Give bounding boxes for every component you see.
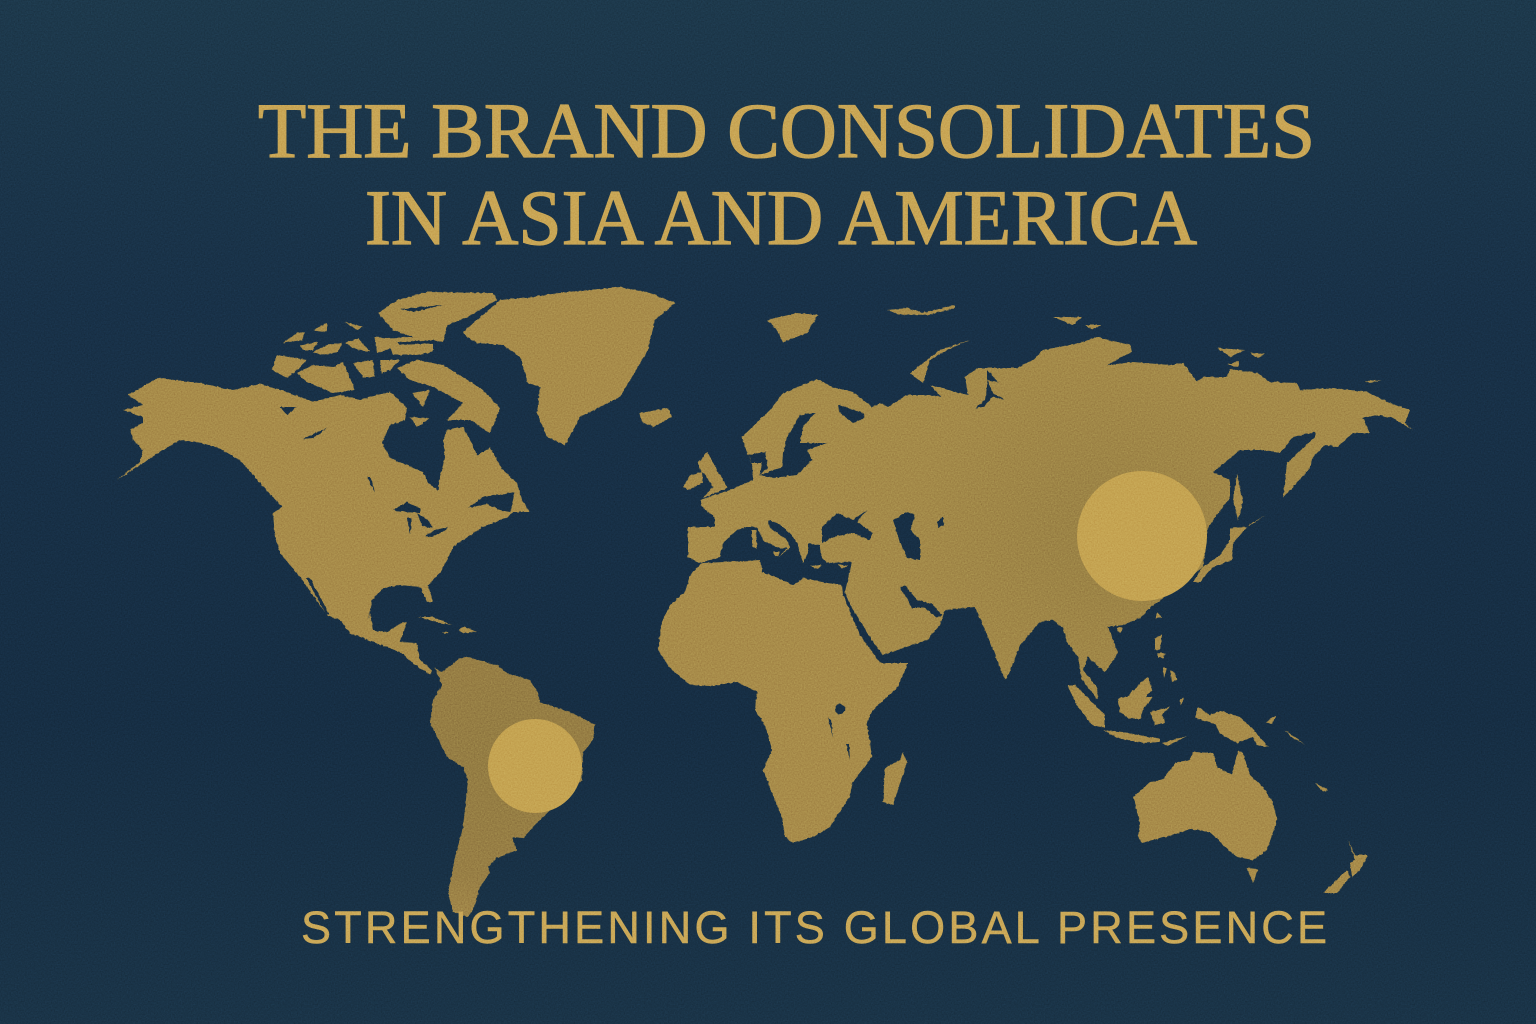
highlight circle: asia xyxy=(1077,471,1207,601)
gulf of st lawrence xyxy=(468,492,515,512)
iceland xyxy=(640,408,672,427)
kattegat xyxy=(747,452,768,475)
title line 1: THE BRAND CONSOLIDATES xyxy=(258,87,1315,174)
persian gulf xyxy=(900,586,942,618)
eurasia xyxy=(688,337,1413,700)
great lakes xyxy=(393,502,448,537)
australia xyxy=(1133,750,1277,883)
aral sea xyxy=(937,517,944,528)
title xyxy=(258,87,1315,261)
arctic channels xyxy=(397,305,443,345)
africa xyxy=(658,560,908,843)
african lakes xyxy=(828,704,850,760)
baltic sea xyxy=(760,413,827,478)
new zealand and pacific islands xyxy=(1265,716,1368,893)
caspian sea xyxy=(893,512,920,560)
world map xyxy=(117,287,1413,917)
new guinea xyxy=(1195,707,1268,747)
white sea xyxy=(838,405,865,423)
black sea xyxy=(822,510,873,543)
canadian lakes xyxy=(280,407,375,493)
sakhalin and japan xyxy=(1193,474,1266,582)
madagascar xyxy=(883,752,907,805)
gulf of ob xyxy=(975,370,1005,408)
highlight circle: south america xyxy=(488,719,582,813)
caribbean islands xyxy=(418,617,477,634)
mediterranean islands xyxy=(752,530,848,569)
subtitle: STRENGTHENING ITS GLOBAL PRESENCE xyxy=(301,902,1327,953)
great britain and ireland xyxy=(683,452,728,498)
arctic ocean russian islands xyxy=(767,305,1382,383)
arctic islands xyxy=(272,292,500,433)
inland seas and lakes xyxy=(280,305,1005,760)
north america xyxy=(117,378,530,675)
greenland xyxy=(463,287,675,445)
south america xyxy=(430,657,595,917)
title line 2: IN ASIA AND AMERICA xyxy=(365,174,1197,261)
gulf of california xyxy=(306,578,329,614)
southeast asian islands xyxy=(1067,612,1187,746)
